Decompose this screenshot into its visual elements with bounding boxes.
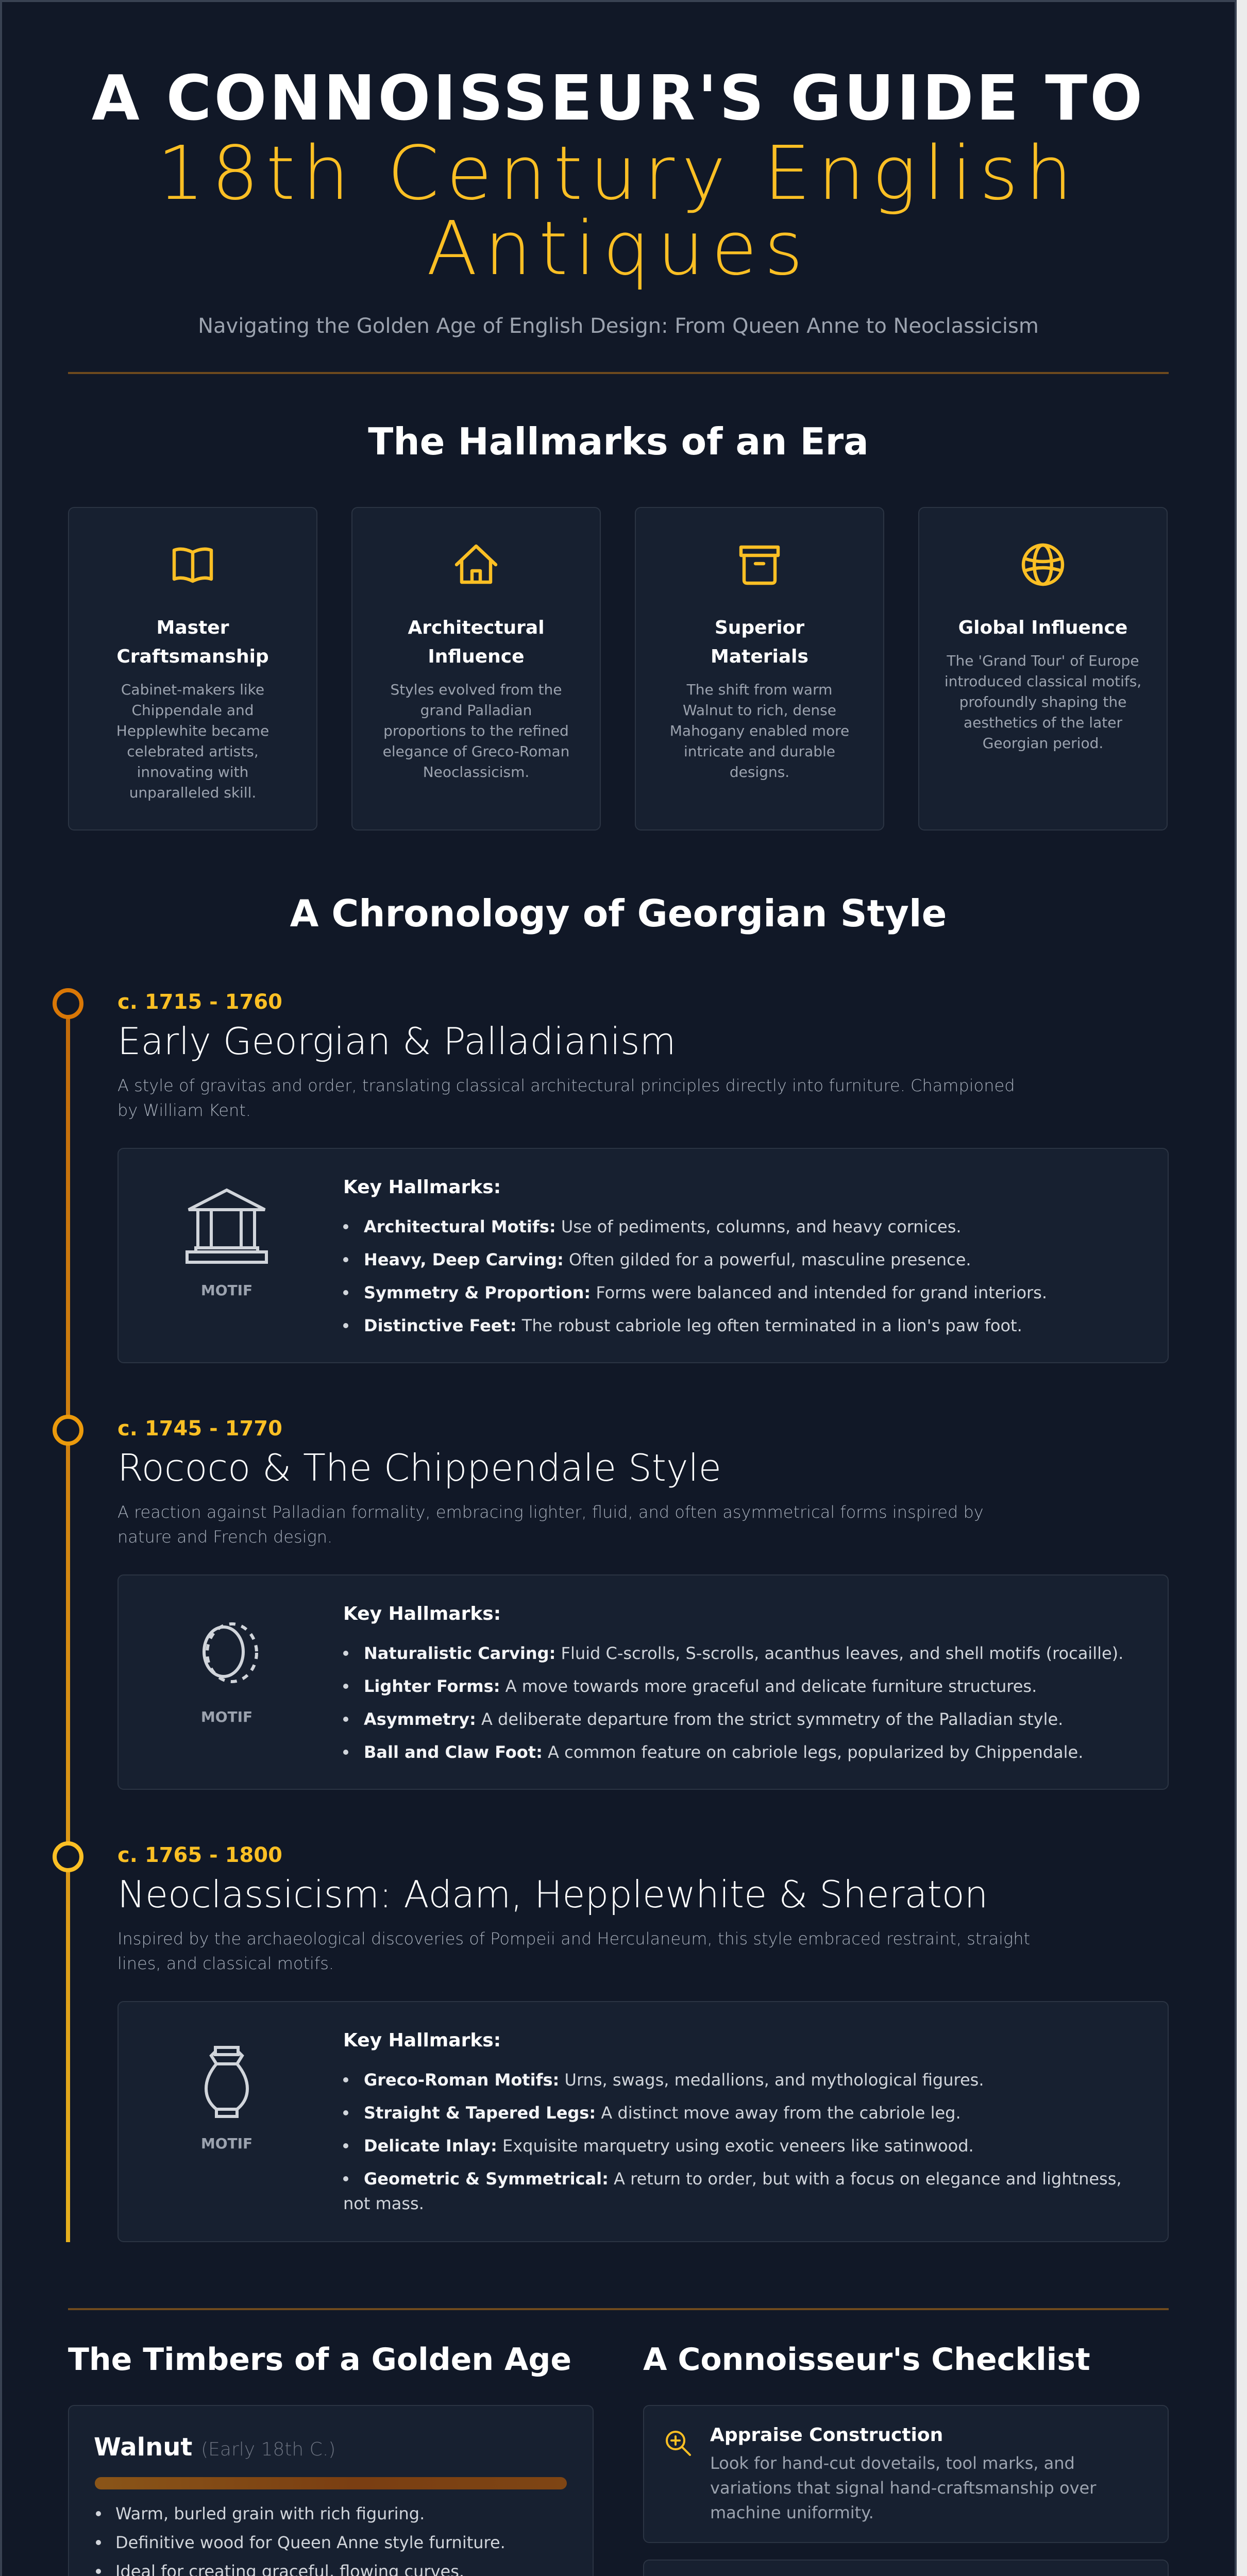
walnut bullets [96,2504,505,2576]
period 1 title: Early Georgian & Palladianism [117,1021,676,1063]
panel: period 3 hallmarks [117,2001,1169,2242]
panel: hallmark cards [68,507,1168,831]
period 1 description: A style of gravitas and order, translating classical architectural principles directly into furniture. Championed [117,1076,1015,1095]
card: master craftsmanship: innovating with [137,765,248,781]
period 3 description [117,1929,1030,1973]
walnut bullets: Definitive wood for Queen Anne style furniture. [115,2533,505,2552]
subtitle: Navigating the Golden Age of English Design: From Queen Anne to Neoclassicism [198,313,1039,338]
timeline marker 2 [53,1415,83,1446]
card: superior materials: Walnut to rich, dense [683,703,836,719]
period 2 date: c. 1745 - 1770 [117,1416,282,1440]
icon: book [172,547,213,583]
period 2 description: nature and French design. [117,1527,332,1547]
card: superior materials: The shift from warm [687,682,832,699]
icon: globe [1021,543,1065,586]
title: amber subtitle lines: 18th Century English [157,130,1080,216]
card: architectural influence: Architectural [408,617,545,639]
list: hallmarks: Lighter Forms: A move towards more graceful and delicate furniture structures. [364,1676,1037,1696]
checklist: examine patina [643,2560,1169,2576]
timeline line [66,1004,70,2242]
heading: checklist: A Connoisseur's Checklist [643,2342,1090,2378]
checklist: appraise construction: machine uniformity. [710,2503,874,2522]
panel: period 2 hallmarks [117,1574,1169,1790]
card: master craftsmanship: Master [157,617,229,639]
list: hallmarks [343,1217,1047,1335]
panel: period 1 hallmarks [117,1148,1169,1363]
card: superior materials: Mahogany enabled more [670,723,849,740]
panel: walnut [68,2405,594,2576]
list: hallmarks: Geometric & Symmetrical: A return to order, but with a focus on elegance and lightness, [364,2169,1122,2189]
timeline marker 3 [53,1841,83,1872]
label: motif: MOTIF [201,2136,252,2153]
period 1 description [117,1076,1015,1120]
heading: hallmarks: The Hallmarks of an Era [368,421,869,464]
title: A CONNOISSEUR'S GUIDE TO [92,63,1145,135]
period 1 date: c. 1715 - 1760 [117,989,282,1014]
walnut heading: Walnut (Early 18th C.) [94,2433,335,2462]
card: global influence: aesthetics of the later [964,715,1122,732]
period 2 title: Rococo & The Chippendale Style [117,1448,721,1490]
card: architectural influence: proportions to the refined [383,723,569,740]
card: master craftsmanship: unparalleled skill. [129,785,256,802]
checklist: appraise construction: variations that signal hand-craftsmanship over [710,2478,1096,2498]
period 2 description: A reaction against Palladian formality, embracing lighter, fluid, and often asymmetrical forms inspired by [117,1502,984,1522]
period 1 description: by William Kent. [117,1100,251,1120]
card: architectural influence: Neoclassicism. [423,765,529,781]
period 3 date: c. 1765 - 1800 [117,1842,282,1867]
list: hallmarks: Straight & Tapered Legs: A distinct move away from the cabriole leg. [364,2103,961,2123]
card: global influence: Global Influence [958,617,1127,639]
heading: chronology: A Chronology of Georgian Style [290,893,947,936]
list: hallmarks: not mass. [343,2194,424,2213]
card: global influence: introduced classical motifs, [945,674,1141,690]
list: hallmarks [343,1643,1123,1762]
card: superior materials: designs. [730,765,789,781]
card: master craftsmanship: celebrated artists, [127,744,259,760]
card: superior materials: Materials [711,646,808,668]
checklist: appraise construction: Appraise Construction [710,2425,943,2446]
card: master craftsmanship: Chippendale and [131,703,254,719]
walnut bullets: Warm, burled grain with rich figuring. [115,2504,425,2523]
card: architectural influence [351,507,601,831]
card: architectural influence: Styles evolved from the [390,682,562,699]
heading: key hallmarks: Key Hallmarks: [343,1603,501,1625]
card: superior materials: Superior [715,617,804,639]
icon: rococo motif [203,1622,258,1683]
title: amber subtitle lines: Antiques [427,205,810,292]
walnut colour bar [95,2477,567,2489]
label: motif: MOTIF [201,1283,252,1299]
period 3 description: Inspired by the archaeological discoveries of Pompeii and Herculaneum, this style embraced restraint, straight [117,1929,1030,1948]
checklist: appraise construction: Look for hand-cut dovetails, tool marks, and [710,2453,1075,2473]
icon: temple motif [186,1188,268,1264]
card: global influence: Georgian period. [983,736,1103,752]
list: hallmarks: Heavy, Deep Carving: Often gilded for a powerful, masculine presence. [364,1250,971,1269]
card: global influence [918,507,1168,831]
icon: urn motif [205,2046,249,2118]
card: master craftsmanship: Cabinet-makers like [121,682,264,699]
icon: magnifier [666,2431,692,2456]
checklist: appraise construction [643,2405,1169,2543]
card: global influence: The 'Grand Tour' of Europe [947,653,1139,670]
label: motif: MOTIF [201,1709,252,1726]
period 3 description: lines, and classical motifs. [117,1954,334,1973]
heading: key hallmarks: Key Hallmarks: [343,1177,501,1198]
list: hallmarks: Greco-Roman Motifs: Urns, swags, medallions, and mythological figures. [364,2070,984,2090]
card: superior materials: intricate and durable [684,744,835,760]
list: hallmarks: Delicate Inlay: Exquisite marquetry using exotic veneers like satinwood. [364,2136,974,2156]
card: architectural influence: elegance of Greco-Roman [383,744,569,760]
card: superior materials [635,507,884,831]
title: amber subtitle lines [157,130,1080,292]
list: hallmarks: Symmetry & Proportion: Forms were balanced and intended for grand interiors. [364,1283,1047,1302]
icon: house [454,544,498,584]
heading: timbers: The Timbers of a Golden Age [68,2342,571,2378]
card: architectural influence: Influence [428,646,525,668]
list: hallmarks [343,2070,1122,2213]
card: master craftsmanship: Craftsmanship [116,646,269,668]
list: hallmarks: Naturalistic Carving: Fluid C-scrolls, S-scrolls, acanthus leaves, and shell motifs (rocaille). [364,1643,1123,1663]
list: hallmarks: Asymmetry: A deliberate departure from the strict symmetry of the Palladian style. [364,1709,1063,1729]
list: hallmarks: Distinctive Feet: The robust cabriole leg often terminated in a lion's paw foot. [364,1316,1022,1335]
list: hallmarks: Architectural Motifs: Use of pediments, columns, and heavy cornices. [364,1217,962,1236]
card: master craftsmanship [68,507,317,831]
period 2 description [117,1502,984,1547]
period 3 title: Neoclassicism: Adam, Hepplewhite & Sheraton [117,1874,988,1917]
card: master craftsmanship: Hepplewhite became [116,723,269,740]
heading: key hallmarks: Key Hallmarks: [343,2030,501,2052]
card: architectural influence: grand Palladian [420,703,532,719]
card: global influence: profoundly shaping the [959,694,1126,711]
icon: archive box [739,545,780,585]
timeline marker 1 [53,988,83,1019]
list: hallmarks: Ball and Claw Foot: A common feature on cabriole legs, popularized by Chippendale. [364,1742,1083,1762]
